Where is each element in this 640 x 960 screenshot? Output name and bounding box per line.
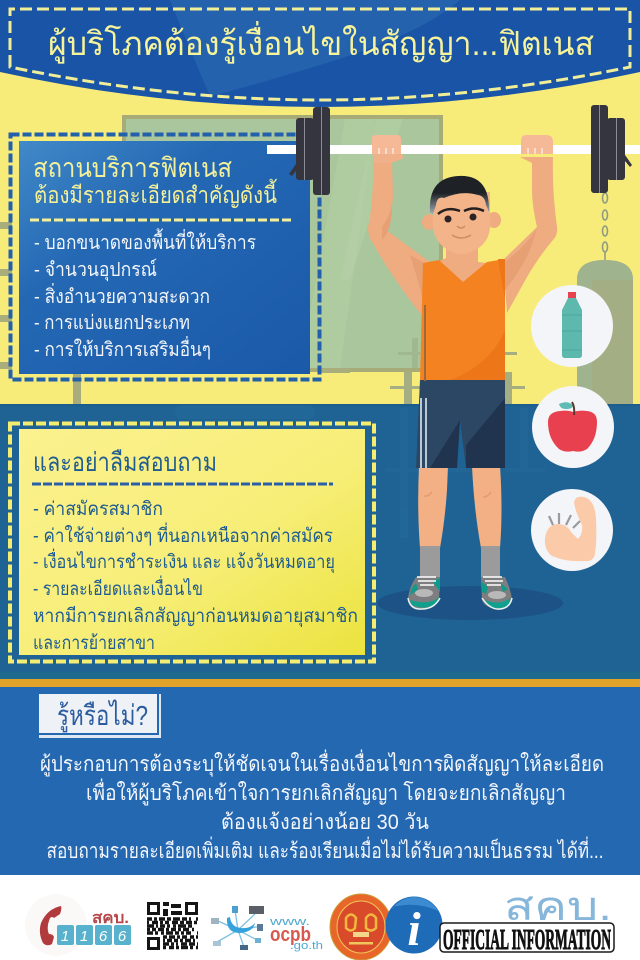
facility checklist: - จำนวนอุปกรณ์ bbox=[34, 258, 157, 282]
logo: ocpb website: www. bbox=[268, 916, 310, 928]
did you know tag: รู้หรือไม่? bbox=[57, 700, 148, 733]
background: gym wall bbox=[0, 0, 640, 404]
logo: hotline 1166 bbox=[25, 894, 131, 956]
icon: apple bbox=[532, 386, 614, 468]
question checklist: - ค่าใช้จ่ายต่างๆ ที่นอกเหนือจากค่าสมัคร bbox=[33, 522, 333, 547]
did you know tag bbox=[39, 694, 161, 738]
icon: flexed muscle bbox=[531, 489, 613, 571]
facility checklist: - การให้บริการเสริมอื่นๆ bbox=[34, 336, 211, 361]
QR code bbox=[147, 902, 198, 950]
head bbox=[422, 176, 501, 254]
question checklist: - รายละเอียดและเงื่อนไข bbox=[33, 575, 203, 600]
did you know body text bbox=[40, 749, 604, 863]
orange tank top bbox=[420, 259, 505, 381]
neck bbox=[439, 240, 487, 283]
barbell bbox=[267, 105, 640, 195]
panel heading: และอย่าลืมสอบถาม bbox=[33, 447, 217, 477]
panel: questions to ask bbox=[10, 424, 374, 662]
panel: facility details bbox=[10, 134, 320, 380]
weight rack behind man bbox=[390, 338, 525, 404]
logo: สคบ. official information: สคบ. bbox=[504, 885, 612, 929]
logo: hotline 1166: สคบ. bbox=[92, 910, 129, 927]
question checklist bbox=[33, 499, 358, 654]
left arm bbox=[368, 135, 430, 317]
facility checklist: - บอกขนาดของพื้นที่ให้บริการ bbox=[34, 228, 256, 254]
punching bag and chain bbox=[577, 193, 633, 404]
logo: consumer protection board seal bbox=[330, 894, 392, 960]
icon: water bottle bbox=[531, 285, 613, 367]
did you know body text: เพื่อให้ผู้บริโภคเข้าใจการยกเลิกสัญญา โดยจะยกเลิกสัญญา bbox=[86, 778, 566, 806]
logo: hotline 1166: 1 bbox=[80, 928, 88, 945]
logo: ocpb website: .go.th bbox=[290, 940, 323, 952]
logo: ocpb website bbox=[211, 906, 323, 952]
question checklist: หากมีการยกเลิกสัญญาก่อนหมดอายุสมาชิก bbox=[33, 605, 358, 628]
logo: สคบ. official information bbox=[440, 885, 614, 956]
panel subheading: ต้องมีรายละเอียดสำคัญดังนี้ bbox=[34, 179, 277, 208]
gold divider stripe bbox=[0, 679, 640, 687]
panel heading: สถานบริการฟิตเนส bbox=[33, 153, 232, 183]
logo: hotline 1166: 6 bbox=[99, 928, 108, 945]
background: gym floor bbox=[0, 404, 640, 680]
window mirror bbox=[122, 115, 443, 372]
socks bbox=[420, 546, 500, 579]
man lifting barbell bbox=[368, 135, 563, 620]
facility checklist: - สิ่งอำนวยความสะดวก bbox=[34, 283, 210, 308]
question checklist: - เงื่อนไขการชำระเงิน และ แจ้งวันหมดอายุ bbox=[33, 548, 335, 574]
shorts bbox=[416, 380, 505, 468]
facility checklist: - การแบ่งแยกประเภท bbox=[34, 312, 190, 334]
banner bbox=[0, 0, 640, 107]
logo: hotline 1166: 6 bbox=[118, 928, 127, 945]
panel: did you know bbox=[0, 687, 640, 875]
logo: hotline 1166: 1 bbox=[61, 928, 69, 945]
icon: information i: i bbox=[407, 903, 421, 956]
banner title: ผู้บริโภคต้องรู้เงื่อนไขในสัญญา...ฟิตเนส bbox=[48, 21, 594, 64]
facility checklist bbox=[34, 228, 256, 361]
right arm bbox=[503, 135, 557, 313]
question checklist: และการย้ายสาขา bbox=[33, 633, 155, 654]
legs bbox=[418, 466, 502, 548]
gym shelf behind panels bbox=[0, 222, 350, 404]
did you know body text: ต้องแจ้งอย่างน้อย 30 วัน bbox=[221, 811, 429, 834]
shadow bbox=[377, 586, 563, 620]
icon: information i bbox=[386, 896, 442, 956]
footer bbox=[0, 875, 640, 960]
question checklist: - ค่าสมัครสมาชิก bbox=[33, 499, 163, 520]
shoes bbox=[408, 577, 512, 609]
logo: ocpb website: ocpb bbox=[270, 924, 311, 946]
